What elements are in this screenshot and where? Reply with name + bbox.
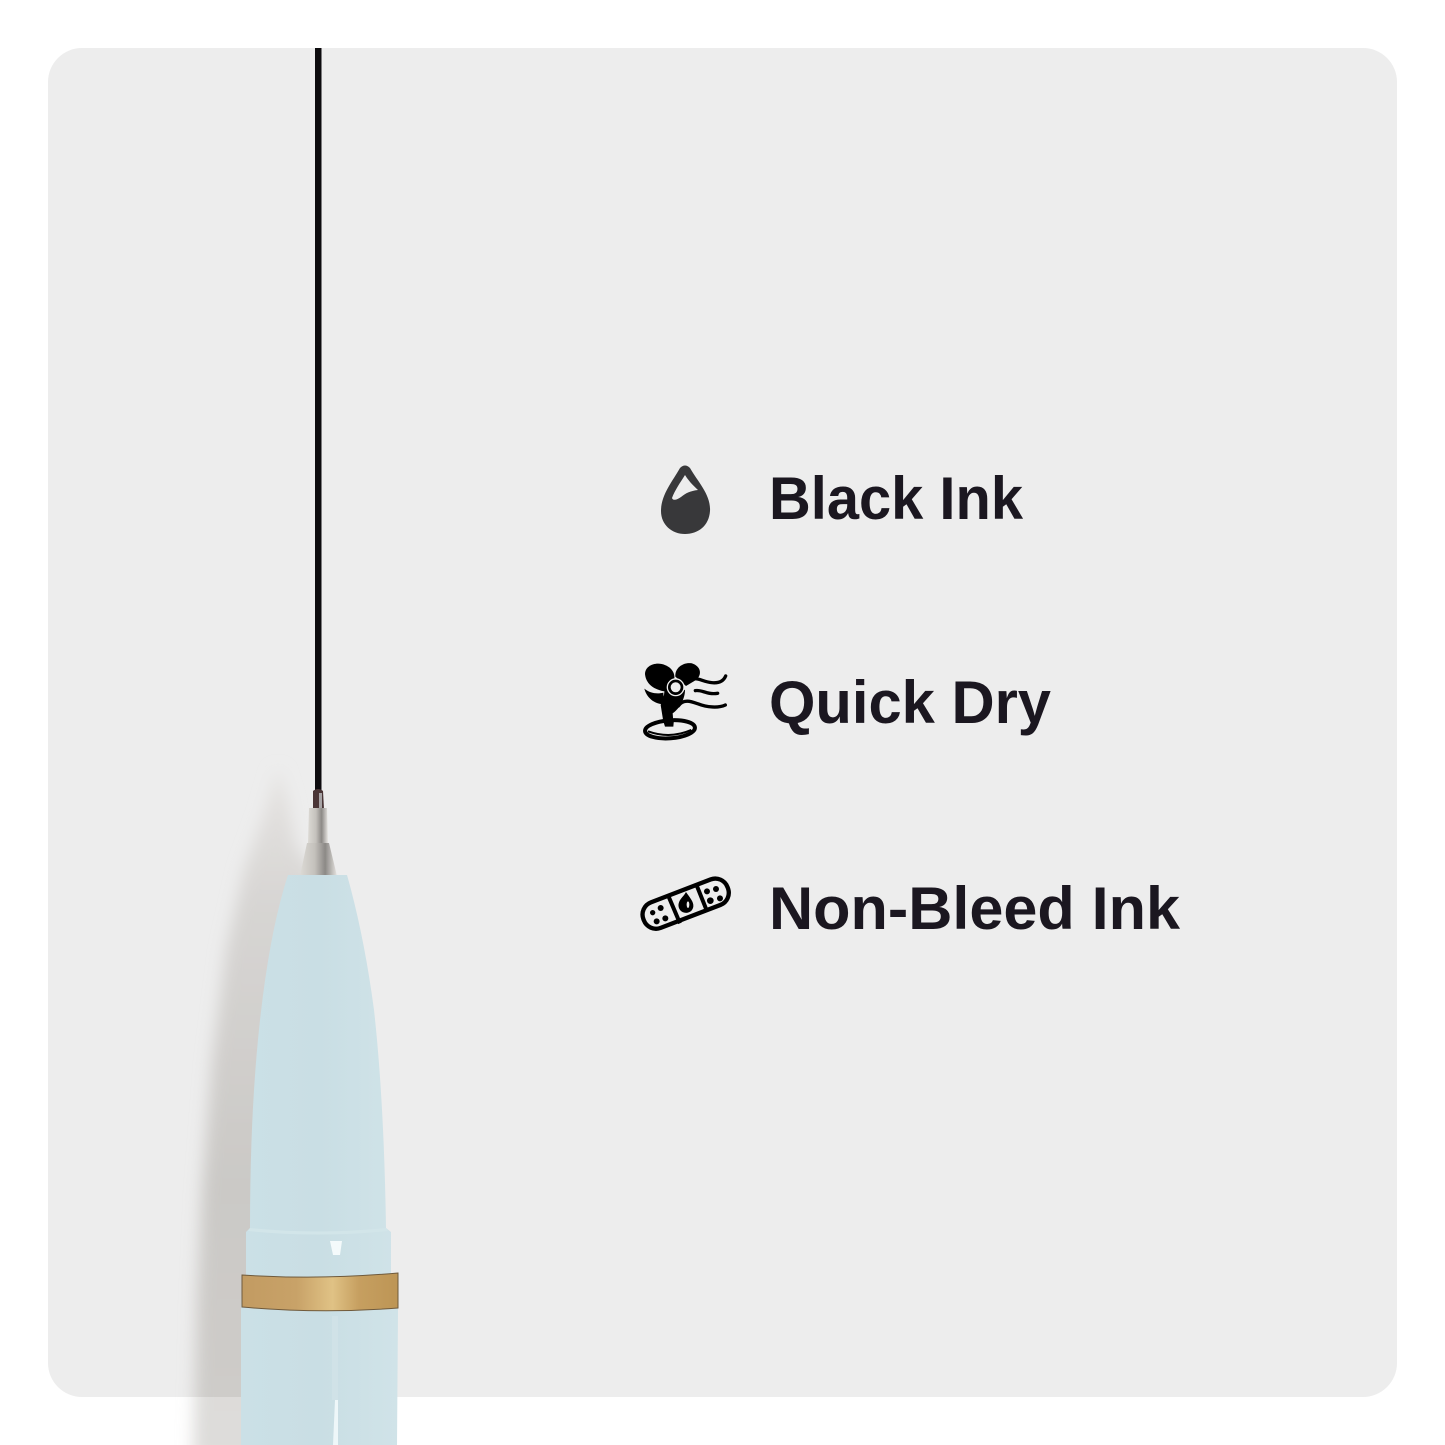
feature: black ink [661, 465, 1024, 534]
metal cone [300, 843, 337, 876]
feature: non-bleed ink [639, 875, 1181, 942]
gold ring [242, 1273, 398, 1311]
icon: ink drop [661, 466, 710, 534]
icon: bandage with drop [639, 875, 733, 933]
pen tip [313, 789, 324, 809]
pen body [241, 875, 398, 1445]
pen illustration [241, 789, 398, 1445]
label: Black Ink: Black Ink [769, 465, 1024, 532]
highlights [330, 1241, 342, 1255]
icon: fan with wind [644, 663, 726, 740]
ink line [315, 48, 322, 793]
pen shadow [193, 768, 320, 1445]
label: Non-Bleed Ink: Non-Bleed Ink [769, 875, 1181, 942]
feature: quick dry [644, 663, 1052, 740]
label: Quick Dry: Quick Dry [769, 669, 1052, 736]
shadow fade below the panel [170, 1397, 241, 1445]
metal sleeve [308, 808, 328, 843]
